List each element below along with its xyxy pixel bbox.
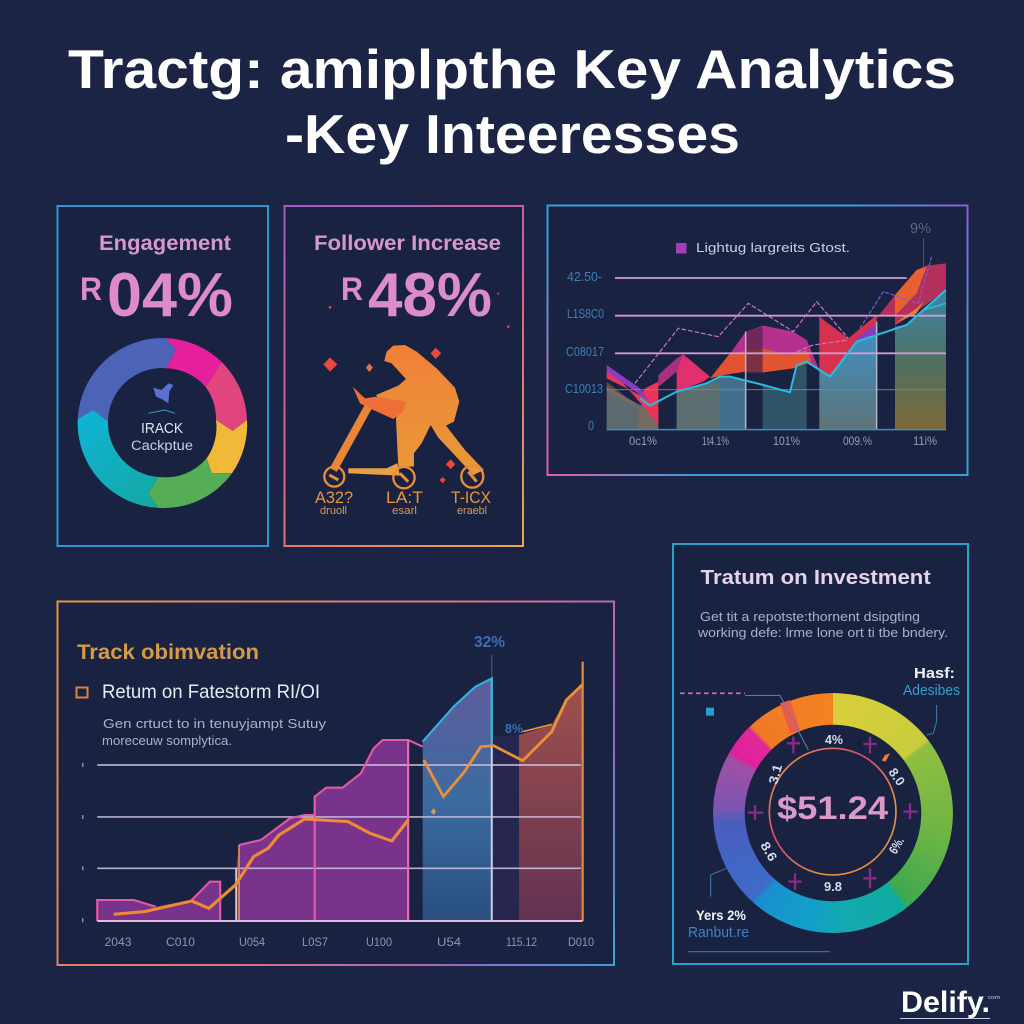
ring details (680, 693, 937, 952)
panel: growth chart (548, 206, 968, 475)
x axis labels: C010 (166, 935, 195, 949)
callout: bottom left: Ranbut.re (688, 925, 749, 941)
y axis labels (565, 270, 604, 433)
legend: Lightug largreits Gtost. (696, 240, 850, 255)
heading: follower increase: Follower Increase (314, 232, 501, 255)
scooter labels (315, 488, 491, 517)
heading: return on investment: Tratum on Investment (701, 567, 931, 589)
description: working defe: lrme lone ort ti tbe bndery. (697, 626, 948, 640)
y axis labels: C08017 (566, 345, 604, 359)
ring center value: $51.24 (777, 790, 888, 826)
x axis labels: U100 (366, 935, 392, 949)
y axis labels: L1S8C0 (567, 307, 604, 321)
metric: engagement value: 04% (107, 261, 233, 330)
x axis labels: U54 (437, 935, 461, 949)
area chart (607, 257, 946, 430)
scooter labels: T-ICX (451, 488, 491, 507)
x axis labels: 115.12 (506, 935, 537, 949)
x axis labels: 2043 (104, 935, 132, 949)
panel: return on investment (673, 544, 968, 964)
donut label (131, 421, 193, 453)
x axis labels: D010 (568, 935, 594, 949)
x axis labels: 11i% (913, 434, 937, 448)
scooter labels: esarl (392, 505, 417, 517)
ring labels: 8.6 (757, 839, 780, 864)
x axis labels: 101% (773, 434, 800, 448)
donut chart (78, 338, 247, 508)
scooter labels: eraebl (457, 505, 487, 517)
scooter labels: LA:T (386, 488, 423, 507)
logo: Delify. (901, 986, 990, 1019)
callout: bottom left: Yers 2% (696, 907, 747, 923)
icon: bird (148, 383, 175, 413)
heading: track: Track obimvation (77, 641, 259, 664)
x axis labels: L0S7 (302, 935, 328, 949)
y axis labels: 0 (588, 419, 594, 433)
metric: follower value: R (341, 271, 363, 307)
description (697, 610, 948, 640)
x axis labels (104, 935, 594, 949)
icon: person pushing scooter (323, 293, 510, 488)
scooter labels: druoll (320, 505, 347, 517)
scooter labels: A32? (315, 488, 353, 507)
x axis labels: 1t4.1% (702, 434, 729, 448)
description: Get tit a repotste:thornent dsipgting (700, 610, 920, 624)
metric: engagement value: R (80, 271, 102, 307)
callout: top right (903, 666, 960, 699)
x axis labels: 0c1% (629, 434, 657, 448)
panel: track observation (58, 602, 614, 965)
callout: peak value: 9% (910, 220, 931, 237)
ring labels: 6%. (886, 834, 907, 856)
callout: top right: Hasf: (914, 666, 955, 682)
metric: follower value: 48% (368, 261, 492, 330)
description: Gen crtuct to in tenuyjampt Sutuy (103, 716, 327, 731)
panel: follower increase (284, 206, 523, 546)
area chart (83, 655, 583, 922)
x axis labels (629, 434, 937, 448)
ring labels: 3.1 (765, 763, 785, 786)
donut label: IRACK (141, 421, 183, 437)
title (68, 38, 956, 165)
ring chart (713, 693, 953, 933)
description (102, 716, 327, 748)
callout: 8%: 8% (505, 721, 523, 736)
heading: engagement: Engagement (99, 232, 231, 255)
callout: bottom left (688, 907, 749, 941)
callout: peak value (910, 220, 931, 272)
ring labels (757, 732, 908, 894)
description: moreceuw somplytica. (102, 733, 232, 748)
ring labels: 9.8 (824, 879, 842, 894)
y axis labels: C10013 (565, 382, 603, 396)
y axis labels: 42.50- (567, 270, 602, 284)
x axis labels: 009.% (843, 434, 872, 448)
title: -Key Inteeresses (285, 103, 740, 165)
title: Tractg: amiplpthe Key Analytics (68, 38, 956, 100)
logo: com (988, 995, 1000, 1001)
panel: engagement (58, 206, 268, 546)
callout: 32%: 32% (474, 634, 505, 651)
ring labels: 8.0 (886, 765, 908, 788)
callout: top right: Adesibes (903, 683, 960, 699)
legend: return: Retum on Fatestorm RI/OI (102, 681, 320, 703)
x axis labels: U054 (239, 935, 265, 949)
donut label: Cackptue (131, 438, 193, 453)
ring labels: 4% (825, 732, 843, 747)
